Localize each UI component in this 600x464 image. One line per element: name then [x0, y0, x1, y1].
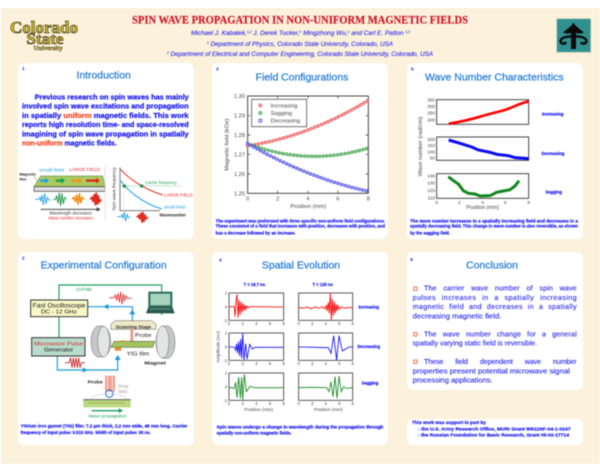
- axis ticks and labels: 2: [241, 321, 244, 326]
- heading: Spatial Evolution: Spatial Evolution: [262, 261, 340, 272]
- axis labels: Wave number (rad/cm): [418, 117, 424, 176]
- chart: sagging wave number: 0: [435, 200, 438, 205]
- chart: decreasing wave number: 200: [427, 137, 435, 142]
- axis ticks and labels: 8: [282, 321, 285, 326]
- chart: sagging wave number: 140: [427, 173, 435, 178]
- line chart: magnetic field vs position: 1.30: [234, 94, 245, 100]
- chart: sagging wave number: 6: [504, 200, 507, 205]
- axis ticks and labels: 8: [282, 361, 285, 366]
- line chart: magnetic field vs position: 1.27: [234, 152, 245, 158]
- axis ticks and labels: 1: [225, 291, 228, 296]
- column headers: T = 18.7 ns: [244, 282, 266, 287]
- axis labels: [418, 117, 499, 211]
- conclusion text: [413, 285, 577, 384]
- caption: Yttrium iron garnet (YIG) film: 7.2 μm thick, 2.2 mm wide, 48 mm long. Carrier: [21, 423, 188, 428]
- line chart: magnetic field vs position: Position (mm): [290, 204, 326, 210]
- plot: increasing T=18.7: [229, 293, 284, 320]
- title: SPIN WAVE PROPAGATION IN NON-UNIFORM MAGNETIC FIELDS: [132, 14, 468, 26]
- chart: sagging wave number: 110: [428, 196, 435, 201]
- heading: Conclusion: Conclusion: [466, 261, 518, 272]
- caption: [217, 425, 384, 435]
- line chart: magnetic field vs position: 1.28: [234, 133, 245, 139]
- box: microwave pulse generator: Microwave Pulse: [34, 341, 83, 347]
- axis ticks and labels: 6: [269, 321, 272, 326]
- caption: [216, 218, 385, 235]
- chart: increasing wave number: 200: [427, 118, 435, 123]
- inset: probe above film: Probe: [88, 380, 103, 386]
- intro paragraph: Previous research on spin waves has mainly: [35, 94, 189, 101]
- panel number 4: 4: [219, 258, 222, 263]
- scanning stage: Scanning Stage: [116, 324, 151, 329]
- axis ticks and labels: Position (mm): [244, 407, 273, 412]
- conclusion text: processing applications.: [413, 376, 493, 384]
- conclusion text: These field dependent wave number: [424, 358, 577, 366]
- GPIB wiring: [59, 285, 162, 338]
- plot: increasing T=125: [299, 293, 353, 320]
- chart: dispersion curves: Carrier frequency: [145, 180, 177, 185]
- diagram: film with wave packets: LARGE FIELD: [69, 167, 100, 173]
- panel: experimental configuration: [18, 252, 194, 445]
- axis labels: Position (mm): [466, 205, 499, 211]
- caption: has a decrease followed by an increase.: [216, 230, 296, 235]
- intro paragraph: non-uniform magnetic fields.: [22, 141, 117, 148]
- axis ticks and labels: 2: [241, 361, 244, 366]
- chart: dispersion curves: Spin wave frequency: [111, 166, 116, 211]
- intro paragraph: [22, 94, 189, 148]
- conclusion text: magnetic field and decreases in a spatially: [413, 303, 577, 311]
- box: fast oscilloscope: DC - 12 GHz: [41, 310, 77, 316]
- authors and affiliations: 1,2: [247, 30, 252, 34]
- magnet right: [156, 326, 175, 358]
- caption: frequency of input pulse: 5.515 GHz. Width of input pulse: 35 ns.: [21, 430, 151, 435]
- logo: Colorado State University: Colorado: [10, 18, 78, 37]
- axis ticks and labels: 0: [228, 361, 231, 366]
- axis ticks and labels: 4: [255, 361, 258, 366]
- axis ticks and labels: 2: [241, 401, 244, 406]
- axis ticks and labels: 6: [269, 361, 272, 366]
- row labels: Increasing: [358, 305, 379, 310]
- panel number 1: 1: [22, 66, 25, 71]
- axis ticks and labels: 0: [225, 304, 228, 309]
- panel number 6: 6: [410, 257, 413, 262]
- YIG film: [111, 340, 166, 366]
- scanning stage: [111, 321, 156, 329]
- authors and affiliations: and Carl E. Patton: [349, 30, 405, 37]
- axis ticks and labels: [215, 291, 354, 412]
- panel: conclusion: [407, 252, 583, 390]
- panel: field configurations: [212, 63, 388, 239]
- axis ticks and labels: -1: [223, 358, 228, 363]
- logo: Colorado State University: [10, 18, 78, 52]
- panel number 2: 2: [22, 255, 25, 260]
- plot: decreasing T=125: [299, 333, 353, 360]
- line chart: magnetic field vs position: Magnetic field (kOe): [225, 119, 231, 171]
- box: fast oscilloscope: Fast Oscilloscope: [33, 303, 86, 309]
- authors and affiliations: Department of Electrical and Computer Engineering, Colorado State University, Colorado, USA: [169, 51, 434, 58]
- caption: by the sagging field.: [410, 230, 450, 235]
- heading: Experimental Configuration: Experimental Configuration: [41, 260, 167, 271]
- conclusion text: spatially varying static field is reversible.: [413, 340, 537, 348]
- chart: dispersion curves: Wavenumber: [159, 213, 186, 218]
- chart legend: Decreasing: [271, 119, 300, 125]
- line chart: magnetic field vs position: [225, 94, 370, 210]
- caption: spatially non-uniform magnetic fields.: [217, 430, 292, 435]
- axis ticks and labels: 4: [255, 321, 258, 326]
- probe: Probe: [135, 333, 152, 339]
- axis ticks and labels: 2: [311, 321, 314, 326]
- caption: spatially decreasing field. This change in wave number is also reversible, as shown: [410, 224, 578, 229]
- diagram: film with wave packets: Magnetic: [19, 172, 37, 177]
- axis ticks and labels: -1: [223, 398, 228, 403]
- row labels: Decreasing: [358, 344, 380, 349]
- axis ticks and labels: 0: [225, 345, 228, 350]
- line chart: magnetic field vs position: 6: [336, 197, 340, 203]
- axis ticks and labels: 0: [297, 401, 300, 406]
- chart legend: Increasing: [271, 103, 298, 109]
- diagram: film with wave packets: [19, 167, 105, 221]
- chart: increasing wave number: [427, 97, 529, 124]
- authors and affiliations: 1: [299, 30, 301, 34]
- YIG film: YIG film: [127, 351, 149, 357]
- authors and affiliations: 1: [207, 41, 209, 45]
- diagram: film with wave packets: Wave number increases: [48, 216, 93, 221]
- bullet squares: [414, 287, 417, 363]
- chart: decreasing wave number: 50: [430, 155, 435, 160]
- GPIB wiring: GPIB: [76, 287, 93, 293]
- series labels: [541, 112, 565, 194]
- authors and affiliations: J. Derek Tucker,: [252, 30, 300, 37]
- conclusion text: The carrier wave number of spin wave: [424, 285, 577, 293]
- chart legend: Sagging: [271, 111, 292, 117]
- axis ticks and labels: 8: [351, 361, 354, 366]
- caption: The experiment was preformed with three specific non-uniform field configurations.: [216, 218, 385, 223]
- panel number 5: 5: [411, 66, 414, 71]
- authors and affiliations: 2: [166, 51, 169, 55]
- authors and affiliations: Department of Physics, Colorado State University, Colorado, USA: [209, 41, 394, 48]
- chart: sagging wave number: 2: [458, 200, 461, 205]
- intro paragraph: imagining of spin wave propagation in spatially: [22, 131, 189, 138]
- chart: decreasing wave number: 150: [427, 143, 435, 148]
- line chart: magnetic field vs position: 2: [276, 197, 279, 203]
- axis ticks and labels: 1: [225, 371, 228, 376]
- inset: probe above film: Wave propagation: [88, 413, 127, 418]
- chart: increasing wave number: 250: [427, 111, 435, 116]
- caption: The wave number increases in a spatially increasing field and decreases in a: [410, 218, 579, 223]
- chart: increasing wave number: 300: [427, 104, 435, 109]
- axis ticks and labels: 6: [269, 401, 272, 406]
- caption: Spin waves undergo a change in wavelength during the propagation through: [217, 425, 384, 430]
- plot: decreasing T=18.7: [229, 333, 284, 360]
- axis ticks and labels: 8: [282, 401, 285, 406]
- inset: probe above film: [83, 376, 131, 418]
- chart: sagging wave number: [427, 173, 530, 205]
- axis ticks and labels: 8: [351, 321, 354, 326]
- axis ticks and labels: 1: [225, 331, 228, 336]
- chart: dispersion curves: LARGE FIELD: [164, 192, 193, 197]
- intro paragraph: involved spin wave excitations and propagation: [22, 104, 189, 111]
- axis ticks and labels: 2: [311, 401, 314, 406]
- diagram: film with wave packets: film: [19, 176, 27, 181]
- authors and affiliations: Michael J. Kabatek,: [191, 30, 249, 37]
- series labels: Decreasing: [541, 151, 565, 156]
- caption: These consisted of a field that increases with position, decreases with position, and: [216, 224, 385, 229]
- series labels: Increasing: [542, 112, 564, 117]
- line chart: magnetic field vs position: 1.25: [234, 191, 245, 197]
- authors and affiliations: Mingzhong Wu,: [301, 30, 348, 37]
- axis ticks and labels: 0: [225, 385, 228, 390]
- plot: sagging T=125: [299, 373, 353, 400]
- panel: support acknowledgement: This work was support in part by: [412, 420, 486, 426]
- column headers: [244, 282, 333, 287]
- axis ticks and labels: 4: [324, 321, 327, 326]
- panel: spatial evolution: [212, 252, 388, 445]
- column headers: T = 125 ns: [313, 282, 333, 287]
- box: microwave pulse generator: Generator: [44, 347, 73, 353]
- chart: increasing wave number: 350: [427, 97, 435, 102]
- line chart: magnetic field vs position: 0: [246, 197, 249, 203]
- panel: support acknowledgement: [407, 419, 583, 445]
- axis ticks and labels: 4: [324, 401, 327, 406]
- inset: probe above film: Stray: [118, 384, 129, 389]
- plot: sagging T=18.7: [229, 373, 284, 400]
- heading: Introduction: Introduction: [76, 71, 131, 82]
- YIG film: Magnet: [144, 360, 166, 366]
- row labels: Sagging: [362, 381, 379, 386]
- conclusion text: pulses increases in a spatially increasing: [413, 294, 577, 302]
- microwave signal wiring: [57, 292, 135, 373]
- conclusion text: properties present potential microwave signal: [413, 367, 570, 375]
- panel: introduction: [18, 63, 194, 239]
- chart: dispersion curves: [111, 166, 193, 223]
- axis ticks and labels: 0: [228, 401, 231, 406]
- chart: sagging wave number: 120: [427, 188, 435, 193]
- logo: tree emblem: [557, 19, 590, 52]
- panel: support acknowledgement: - the U.S. Army Research Office, MURI Grant W911NF-04-1-0247: [418, 426, 571, 432]
- heading: Wave Number Characteristics: Wave Number Characteristics: [425, 73, 564, 84]
- line chart: magnetic field vs position: 1.26: [234, 172, 245, 178]
- chart: sagging wave number: 130: [427, 181, 435, 186]
- diagram: film with wave packets: Wavelength decreases: [49, 210, 92, 215]
- probe: [130, 329, 152, 343]
- box: microwave pulse generator: [32, 338, 85, 356]
- axis ticks and labels: Position (mm): [314, 407, 343, 412]
- intro paragraph: in spatially uniform magnetic fields. This work: [22, 113, 189, 120]
- chart: dispersion curves: small field: [164, 205, 186, 210]
- inset: probe above film: field: [119, 389, 127, 394]
- axis ticks and labels: -1: [223, 318, 228, 323]
- heading: Field Configurations: Field Configurations: [256, 73, 348, 84]
- axis ticks and labels: 6: [338, 321, 341, 326]
- axis ticks and labels: 8: [351, 401, 354, 406]
- panel number 3: 3: [216, 66, 219, 71]
- diagram: film with wave packets: small field: [39, 168, 64, 174]
- axis ticks and labels: 0: [228, 321, 231, 326]
- authors and affiliations: [166, 30, 434, 58]
- axis ticks and labels: 6: [338, 401, 341, 406]
- series labels: Sagging: [545, 189, 562, 194]
- line chart: magnetic field vs position: 8: [367, 197, 370, 203]
- axis ticks and labels: 0: [297, 321, 300, 326]
- conclusion text: The wave number change for a general: [424, 330, 577, 338]
- authors and affiliations: 1: [348, 30, 349, 34]
- line chart: magnetic field vs position: 4: [306, 197, 310, 203]
- panel: support acknowledgement: - the Russian Foundation for Basic Research, Grant 05-02-17714: [418, 433, 569, 439]
- caption: [410, 218, 579, 235]
- chart: decreasing wave number: [427, 137, 529, 160]
- logo: Colorado State University: State: [26, 31, 64, 48]
- axis ticks and labels: Amplitude (AU): [215, 330, 220, 362]
- axis ticks and labels: 0: [297, 361, 300, 366]
- panel: wave number characteristics: [407, 63, 583, 239]
- axis ticks and labels: 6: [338, 361, 341, 366]
- caption: [21, 423, 188, 435]
- axis ticks and labels: 2: [311, 361, 314, 366]
- line chart: magnetic field vs position: 1.29: [234, 114, 245, 120]
- box: fast oscilloscope: [31, 300, 88, 317]
- chart: sagging wave number: 4: [481, 200, 484, 205]
- chart: decreasing wave number: 100: [427, 149, 435, 154]
- axis ticks and labels: 4: [324, 361, 327, 366]
- axis ticks and labels: 4: [255, 401, 258, 406]
- conclusion text: decreasing magnetic field.: [413, 312, 501, 320]
- intro paragraph: reports high resolution time- and space-resolved: [22, 122, 189, 129]
- row labels: [358, 305, 380, 386]
- authors and affiliations: 1,2: [405, 30, 410, 34]
- icon: laptop: [146, 292, 175, 313]
- chart legend: [252, 99, 307, 127]
- magnet left: [91, 326, 111, 357]
- chart: sagging wave number: 8: [527, 200, 530, 205]
- logo: Colorado State University: University: [34, 45, 63, 52]
